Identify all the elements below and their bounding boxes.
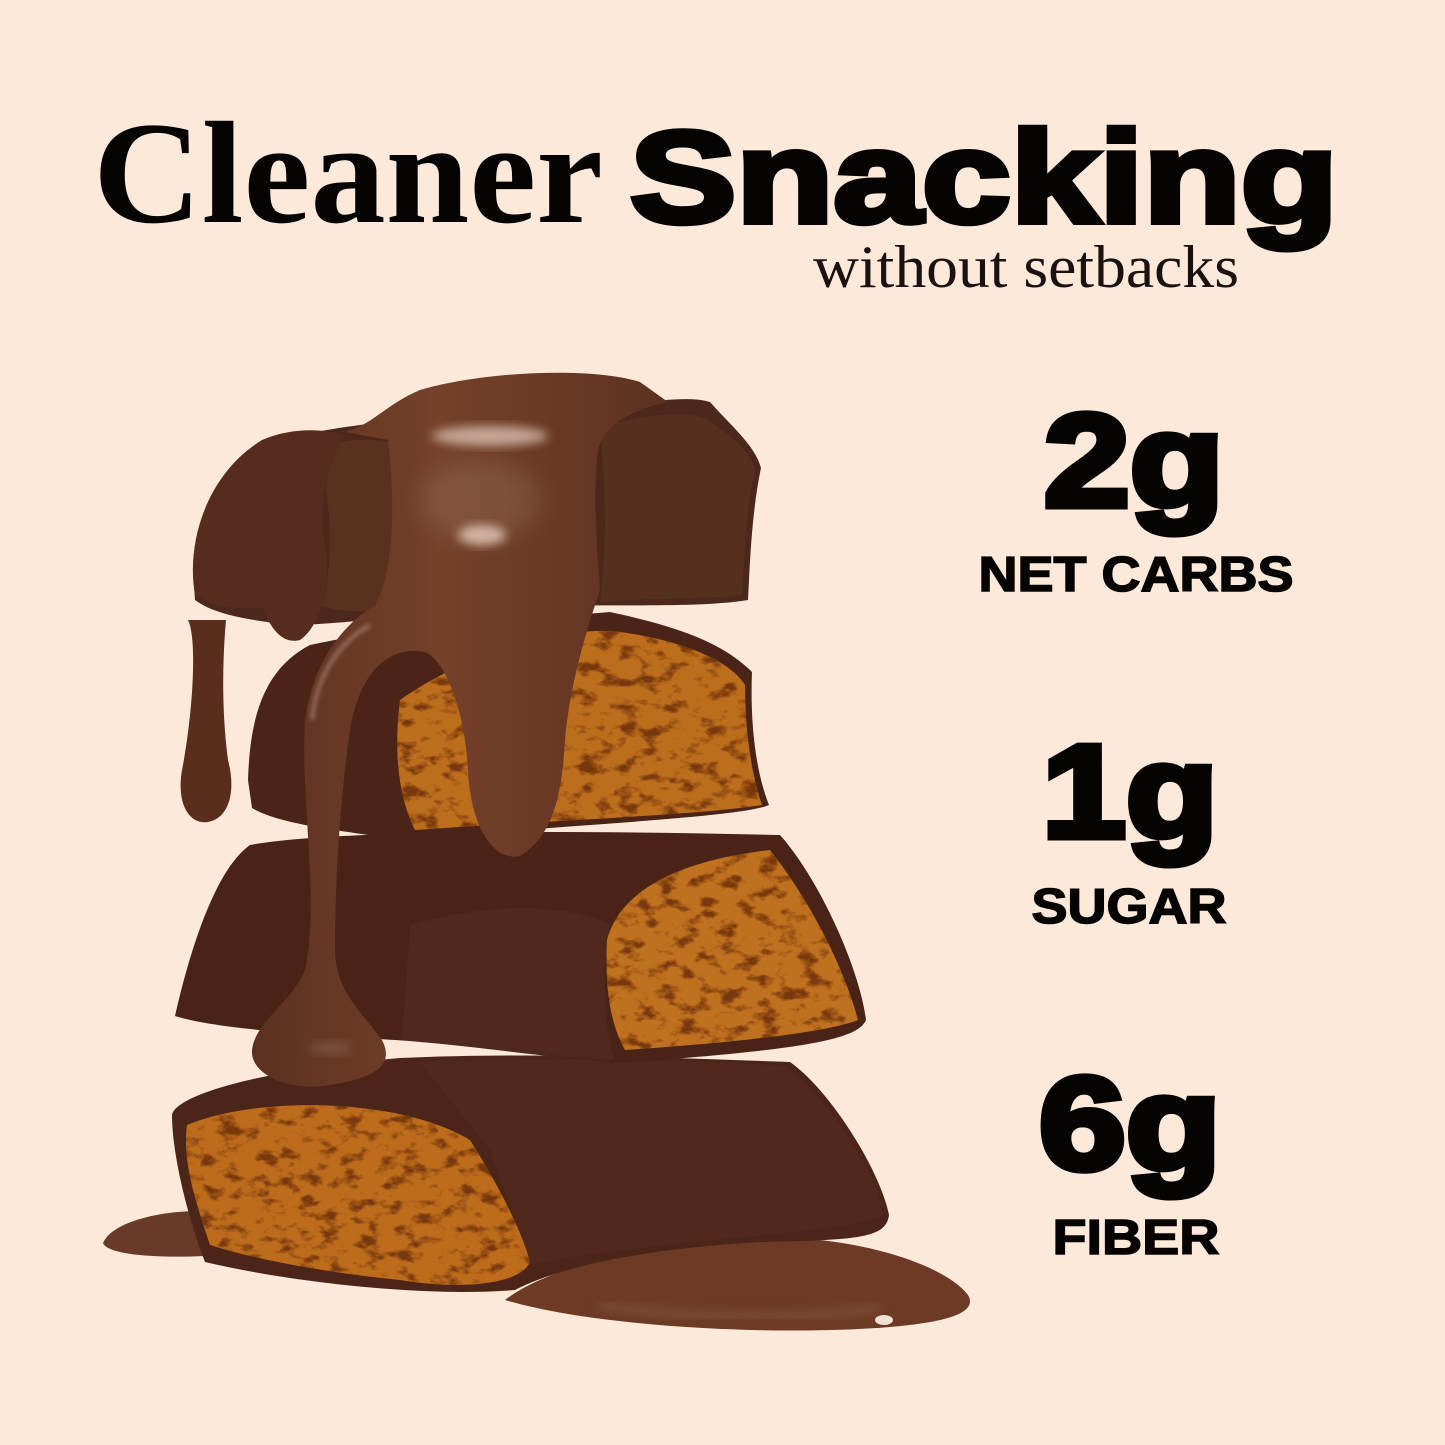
title (93, 92, 1338, 254)
bar 3 (175, 832, 866, 1063)
stat: 2g net carbs: NET CARBS (978, 548, 1294, 602)
illustration: stack of chocolate bars (103, 373, 970, 1331)
subtitle: without setbacks (813, 234, 1239, 300)
stat: 1g sugar (1032, 718, 1226, 934)
title: Cleaner (93, 92, 603, 254)
stat: 6g fiber: 6g (1039, 1050, 1221, 1197)
stat: 6g fiber (1039, 1050, 1221, 1265)
chocolate drizzle (181, 373, 668, 1087)
stat: 2g net carbs (978, 387, 1294, 602)
highlights (308, 426, 548, 1054)
chocolate puddle (103, 1211, 970, 1331)
stat: 1g sugar: SUGAR (1032, 880, 1226, 934)
stat: 1g sugar: 1g (1042, 718, 1218, 865)
stat: 6g fiber: FIBER (1052, 1211, 1220, 1265)
bar 1 (top) (194, 399, 761, 625)
stat: 2g net carbs: 2g (1044, 387, 1224, 534)
bar 4 (bottom) (172, 1055, 889, 1292)
bar 2 (248, 612, 769, 840)
title: Snacking (630, 104, 1338, 250)
